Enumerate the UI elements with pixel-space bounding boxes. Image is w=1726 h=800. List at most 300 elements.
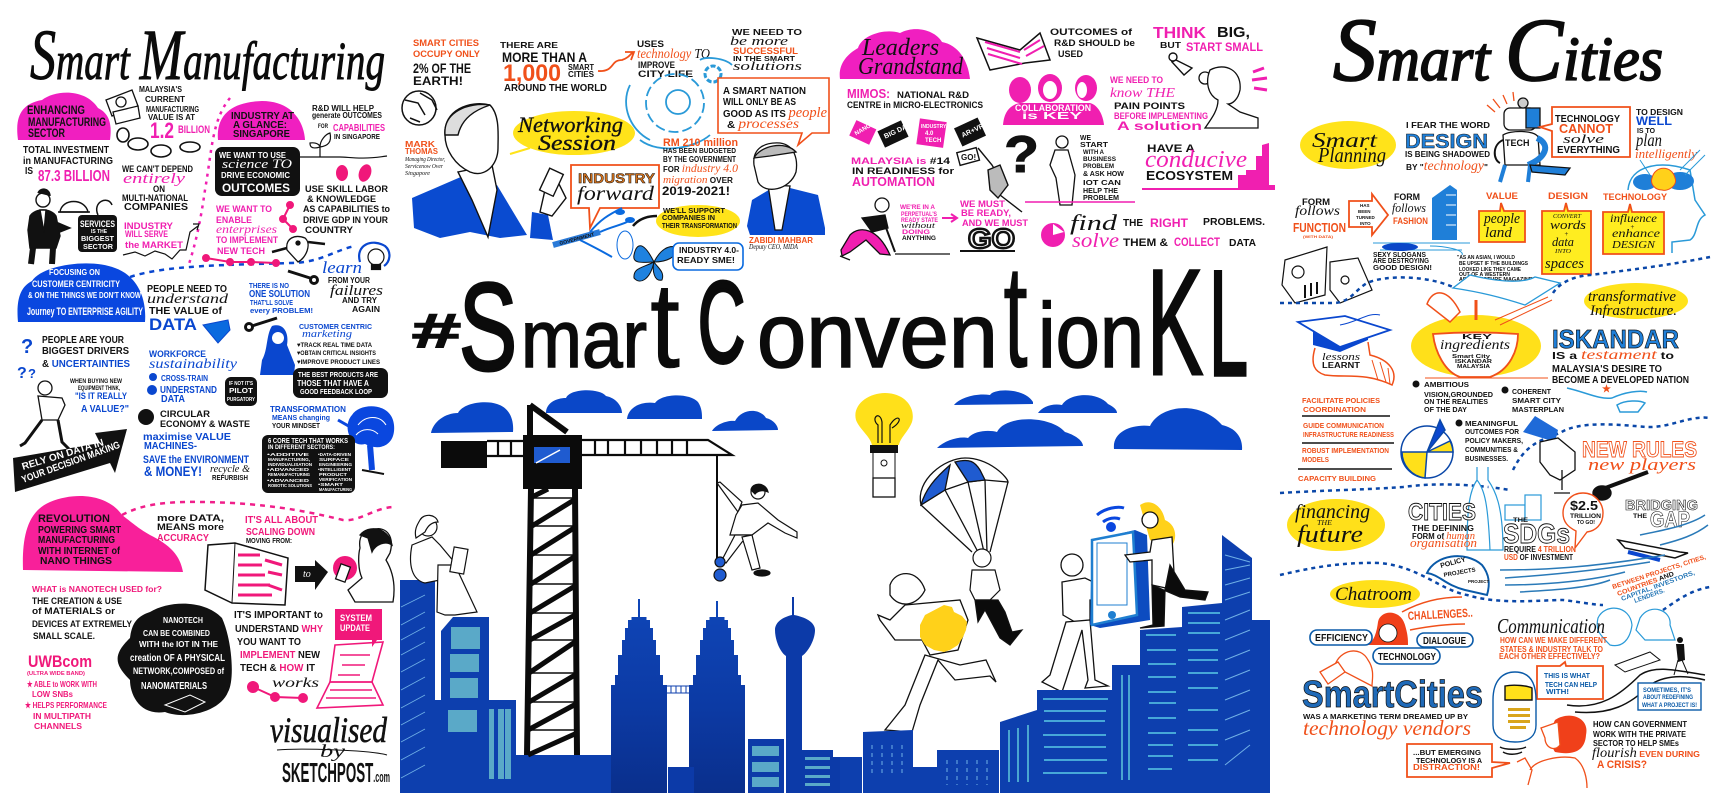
text: technology improves city life: IMPROVE [638,60,675,70]
callout: industry forward: INDUSTRY [578,170,656,186]
icon: robot [272,236,325,262]
text: uwbcom: CHANNELS [34,721,82,731]
text: more data accuracy: more DATA, [157,513,224,523]
text: meaningful outcomes: POLICY MAKERS, [1465,436,1523,445]
card: technology: DESIGN [1611,240,1657,251]
text: uwbcom: IN MULTIPATH [33,711,91,721]
card: technology: enhance [1612,226,1661,240]
illustration: person with phone [333,529,394,602]
callout: emerging tech distraction [1407,744,1510,777]
callout: nanotech black cloud: CAN BE COMBINED [143,629,210,638]
text: asian quote [1457,255,1536,283]
text: uwbcom: (ULTRA WIDE BAND) [27,671,85,677]
text: zabidi mahbar caption [748,236,813,251]
text: rm 210 million budget: HAS BEEN BUDGETED [663,148,736,155]
text: rm 210 million budget: migration OVER [663,174,733,186]
text: smart cities occupy 2%: SMART CITIES [413,38,479,48]
text: government and smes: flourish EVEN DURING [1592,746,1700,761]
text: iskandar testament [1552,324,1689,386]
panel: six core tech: ROBOTIC SOLUTIONS [268,483,312,488]
icon: question marks: ? [21,336,33,358]
text: to design well is to plan: intelligently [1635,146,1697,161]
text: value of data: PEOPLE NEED TO [147,284,227,295]
callout: rely on data arrow: RELY ON DATA IN [21,437,105,473]
text: maximise value machines: maximise VALUE [143,432,231,443]
callout: pilot purgatory: PILOT [229,388,254,395]
icon: wifi [1097,507,1124,530]
callout: support companies: THEIR TRANSFORMATION [662,223,737,230]
heading: #SmartConventionKL [414,234,1248,407]
callout: nanotech black cloud: NETWORK,COMPOSED of [133,666,225,676]
callout: drive economic outcomes [215,147,300,196]
text: between projects cities: BETWEEN PROJECTS, CITIES, [1611,554,1707,591]
arrow: to city life [598,52,634,71]
card: technology: TECHNOLOGY [1603,192,1668,203]
illustration: woman on winding road [1567,637,1705,713]
heading: #SmartConventionKL: # [414,305,460,357]
text: more successful solutions: SUCCESSFUL [733,46,798,57]
card: value: people [1483,211,1520,227]
text: find the right problems: PROBLEMS. [1203,217,1265,228]
illustration: government plant hand: GOVERNMENT [559,232,595,247]
text: find the right problems: COLLECT [1174,235,1221,249]
callout: what tech can help with: TECH CAN HELP [1545,680,1597,689]
text: is it really a value: A VALUE?" [81,404,129,415]
text: perpetual ready state: DOING [902,230,930,236]
panel: six core tech: •DATA-DRIVEN [318,452,351,457]
text: smart cities occupy 2% [413,38,480,88]
callout: $2.5 trillion to go [1563,493,1603,548]
text: fear the word design: BY "technology" [1406,159,1488,174]
text: meaningful outcomes: BUSINESSES. [1465,454,1508,463]
arrow: has been turned into: HAS [1360,203,1370,208]
callout: smart nation people and processes: A SMART NATION [723,86,806,97]
text: more successful solutions: solutions [733,58,802,73]
text: think big start small: START SMALL [1186,40,1263,54]
text: current manufacturing value [139,85,210,143]
panel: six core tech: INDIVIDUALISATION [268,462,312,467]
text: coherent masterplan: MASTERPLAN [1512,405,1564,414]
panel: six core tech: •ADDITIVE [267,452,309,457]
text: industry will serve the market: WILL SERVE [125,229,168,239]
text: more than 1,000 smart cities: AROUND THE WORLD [504,83,607,94]
callout: drive economic outcomes: science TO [222,156,293,171]
text: readiness for automation: IN READINESS for [852,166,954,177]
text: mark thomas caption: MARK [405,140,435,149]
text: business problem: WE [1080,133,1091,142]
callout: feedback loop: GOOD FEEDBACK LOOP [300,389,372,396]
callout: emerging tech distraction: ...BUT EMERGING [1413,748,1481,757]
text: sdgs: REQUIRE 4 TRILLION [1504,545,1576,554]
text: uwbcom: ★ ABLE to WORK WITH [27,679,97,689]
callout: technology cannot solve everything: CANNOT [1559,121,1613,136]
callout: technology cannot solve everything: EVERYTHING [1557,145,1620,156]
callout: smart nation people and processes [718,78,829,145]
text: form follows function: follows [1295,204,1341,219]
icon: pink network nodes [203,202,296,266]
text: uwbcom: LOW SNBs [32,689,73,699]
text: ambitious vision: ON THE REALITIES [1424,397,1488,406]
panel: six core tech: ENGINEERING [319,462,353,467]
text: no one solution: ONE SOLUTION [249,289,310,300]
text: more data accuracy: MEANS more [157,522,224,532]
text: outcomes of r&d: OUTCOMES of [1050,27,1133,37]
text: mark thomas caption: Singapore [405,171,430,177]
callout: drive economic outcomes: WE WANT TO USE [219,150,286,160]
panel: six core tech: MANUFACTURING [319,487,352,492]
text: more data accuracy [157,513,224,544]
text: visualised by sketchpost: visualised [270,710,388,750]
callout: system update [335,609,382,647]
illustration: key ingredients bowl: MALAYSIA [1457,364,1490,370]
text: form follows fashion: FORM [1394,192,1420,202]
callout: pilot purgatory [225,377,257,406]
text: we must go: BE READY, [961,208,1011,218]
text: form follows function: (WITH DATA) [1303,234,1334,239]
panel: six core tech: VERIFICATION [319,477,352,482]
illustration: left buildings [400,580,631,793]
text: r&d generates outcomes: IN SINGAPORE [334,134,380,141]
card: design: INTO [1554,249,1572,255]
text: communication [1497,614,1607,661]
illustration: starter pistol go flag [957,148,1022,212]
text: r&d generates outcomes: R&D WILL HELP [312,104,375,113]
illustration: skyscraper on water [1373,185,1470,255]
illustration: woman with challenges [1368,597,1473,645]
callout: services biggest sector: BIGGEST [81,236,115,243]
callout: drive economic outcomes: OUTCOMES [222,181,290,195]
text: skilled labor: COUNTRY [305,225,354,236]
text: why implement new tech: TECH & HOW IT [240,662,316,674]
arrow: to must be ready [942,214,957,222]
text: government and smes: A CRISIS? [1597,759,1647,771]
callout: drive economic outcomes: DRIVE ECONOMIC [221,170,290,180]
text: smart cities occupy 2%: OCCUPY ONLY [413,49,480,59]
text: customer centric marketing: marketing [302,328,353,340]
icon: globe [402,91,437,125]
text: form follows function: FORM [1302,197,1330,207]
text: zabidi mahbar caption: Deputy CEO, MIDA [748,243,799,251]
arrow: to smaller tech [295,560,328,590]
callout: customer centricity blue cloud: Journey TO ENTERPRISE AGILITY [27,306,143,318]
text: cities defining form: CITIES [1408,499,1476,526]
icon: question marks: ? [17,365,27,382]
illustration: graduation cap lessons learnt: lessons [1322,351,1360,363]
callout: industry at a glance singapore [218,101,305,140]
callout: nanotech black cloud: WITH the IOT IN THE [139,640,219,649]
callout: what tech can help with: WITH! [1546,687,1569,696]
text: we must go: WE MUST [960,199,1006,209]
illustration: zabidi mahbar portrait [747,143,825,235]
text: why implement new tech: IT'S IMPORTANT to [234,609,323,621]
icon: cyan gears [626,58,732,148]
card: value: land [1485,225,1513,241]
panel: smart manufacturing [13,15,395,788]
panel: six core tech: •ADVANCED [267,478,310,483]
callout: redefining a project: ABOUT REDEFINING [1643,695,1693,701]
text: we must go: GO [968,223,1015,254]
illustration: brain figure [338,406,394,474]
text: mimos: CENTRE in MICRO-ELECTRONICS [847,100,983,111]
text: business problem: PROBLEM [1083,195,1119,202]
callout: policy projects: PROJECT [1468,579,1490,584]
text: perpetual ready state [900,205,938,242]
panel: six core tech: IN DIFFERENT SECTORS: [268,445,335,451]
callout: customer centricity blue cloud: CUSTOMER CENTRICITY [32,279,120,289]
icon: book [977,33,1050,70]
text: what is nanotech: SMALL SCALE. [33,631,95,641]
arrow: to smaller tech: to [303,569,311,580]
text: mimos: MIMOS: [847,86,890,101]
text: fear the word design: DESIGN [1405,131,1488,153]
text: mimos: NATIONAL R&D [897,90,969,101]
panel: six core tech: MANUFACTURING, [268,457,310,462]
illustration: light blue city towers [1467,467,1541,550]
text: transformation mindset: YOUR MINDSET [272,421,320,430]
text: rm 210 million budget: 2019-2021! [662,184,730,198]
text: value of data [147,284,229,334]
illustration: orange hair man [1517,716,1587,788]
heading: smart cities: Smart Cities [1333,1,1663,100]
icon: question marks [17,336,36,382]
callout: redefining a project: SOMETIMES, IT'S [1643,688,1691,694]
callout: emerging tech distraction: DISTRACTION! [1413,763,1480,772]
callout: industry at a glance singapore: INDUSTRY AT [231,111,294,122]
text: zabidi mahbar caption: ZABIDI MAHBAR [749,236,813,245]
illustration: thinking man [1025,136,1135,205]
card: technology: + [1630,223,1635,231]
callout: what tech can help with: THIS IS WHAT [1544,671,1590,680]
illustration: collaboration is key: COLLABORATION [1015,103,1091,113]
illustration: man with glasses [1042,554,1122,692]
text: conducive ecosystem [1145,143,1247,183]
text: perpetual ready state: READY STATE [901,218,938,224]
text: rm 210 million budget: BY THE GOVERNMENT [663,155,736,164]
text: cities defining form: THE DEFINING [1412,524,1474,533]
text: is it really a value: WHEN BUYING NEW [70,379,122,385]
text: perpetual ready state: ANYTHING [902,236,936,242]
text: to design well is to plan: WELL [1636,114,1672,128]
callout: financing the future: THE [1317,519,1333,527]
text: current manufacturing value: MALAYSIA'S [139,85,183,94]
callout: smart planning [1300,121,1396,169]
text: no one solution: THAT'LL SOLVE [250,300,293,307]
text: scaling down: IT'S ALL ABOUT [245,515,318,526]
illustration: blue woman [260,325,295,375]
text: new rules new players: new players [1588,455,1696,474]
callout: $2.5 trillion to go: TRILLION [1570,514,1601,520]
illustration: key ingredients bowl: ingredients [1440,338,1511,353]
text: what is nanotech: of MATERIALS or [32,606,116,616]
text: outcomes of r&d: USED [1058,49,1083,59]
text: know the pain points: PAIN POINTS [1114,101,1185,111]
callout: nanotech black cloud [118,604,232,715]
callout: industry at a glance singapore: SINGAPORE [233,129,290,140]
text: meaningful outcomes: OUTCOMES FOR [1465,427,1520,436]
text: communication: HOW CAN WE MAKE DIFFERENT [1500,636,1607,645]
callout: emerging tech distraction: TECHNOLOGY IS A [1416,756,1483,765]
text: r&d generates outcomes [312,104,385,141]
text: new rules new players: NEW RULES [1582,437,1697,462]
arrow: has been turned into [1349,194,1388,235]
text: technology improves city life: CITY LIFE [638,69,693,79]
icon: blue light bulb [359,243,389,269]
text: perpetual ready state: without [901,221,936,230]
text: bridging the gap: BRIDGING [1625,497,1698,514]
text: enable enterprises: WE WANT TO [216,204,272,215]
text: skilled labor: & KNOWLEDGE [307,194,376,205]
icon: orange bulb [1320,651,1373,686]
text: asian quote: "AS AN ASIAN, I WOULD [1457,255,1515,261]
text: know the pain points: BEFORE IMPLEMENTING [1114,111,1208,121]
text: current manufacturing value: MANUFACTURING [146,105,199,114]
callout: feedback loop [293,368,388,398]
callout: chatroom [1330,580,1420,608]
text: between projects cities: LENDERS. [1633,587,1666,605]
text: visualised by sketchpost [270,710,390,788]
icon: pawn [1169,53,1192,75]
text: readiness for automation [851,156,954,189]
icon: sprout [300,133,387,158]
tag: technology [1373,648,1440,664]
text: cities defining form: organisation [1410,535,1477,550]
list: lessons learnt: CAPACITY BUILDING [1298,474,1376,483]
text: iskandar testament: MALAYSIA'S DESIRE TO [1552,364,1662,375]
text: is it really a value: "IS IT REALLY [75,391,127,401]
text: business problem: BUSINESS [1083,156,1117,163]
tag: efficiency [1310,630,1372,645]
callout: networking session [510,111,635,155]
callout: redefining a project [1638,683,1701,710]
text: find the right problems [1070,210,1265,252]
text: value of data: DATA [149,315,197,334]
chart: rising pink bars [1142,143,1275,190]
text: more successful solutions [730,27,802,73]
text: find the right problems: THEM & [1123,237,1168,249]
list: lessons learnt: GUIDE COMMUNICATION [1303,421,1384,430]
card: design: CONVERT [1553,214,1582,220]
text: find the right problems: THE [1123,218,1143,229]
text: technology improves city life: USES [637,39,664,49]
text: more than 1,000 smart cities: CITIES [568,70,595,79]
text: multi-national companies: WE CAN'T DEPEND [122,164,193,175]
illustration: key ingredients bowl: Smart City [1452,354,1490,360]
illustration: walking man [20,381,72,452]
text: why implement new tech: IMPLEMENT NEW [240,649,320,661]
illustration: brush and river [1500,515,1708,592]
text: business problem: IOT CAN [1083,178,1121,187]
text: sdgs [1503,518,1576,562]
text: visualised by sketchpost: SKETCHPOST.com [282,757,390,788]
icons: technology puzzle pieces: AR+VR [961,123,985,139]
text: mark thomas caption: Managing Director, [404,157,445,163]
callout: industry forward [571,165,659,228]
text: workforce sustainability: WORKFORCE [149,349,206,359]
tag: dialogue [1417,633,1473,647]
callout: pilot purgatory: PURGATORY [227,397,255,403]
text: what is nanotech: DEVICES AT EXTREMELY [32,619,132,629]
text: multi-national companies: ON [153,184,165,195]
list: lessons learnt [1298,396,1394,483]
callout: transformative infrastructure: Infrastructure. [1589,303,1677,319]
text: total investment: IS [25,166,33,177]
illustration: sprinter ready [840,198,950,260]
illustration: collaboration is key [1003,74,1104,125]
callout: policy projects: POLICY [1440,556,1467,570]
text: coherent masterplan: SMART CITY [1512,396,1561,405]
illustration: kl tower [748,597,853,793]
tag: technology: TECHNOLOGY [1378,652,1436,663]
text: customer centric marketing: ♥OBTAIN CRITICAL INSIGHTS [297,350,377,357]
text: more successful solutions: WE NEED TO [732,27,802,37]
text: cities defining form: FORM of human [1412,530,1475,542]
heading: #SmartConventionKL: t [1003,234,1028,399]
text: ambitious vision: OF THE DAY [1424,405,1467,414]
callout: leaders grandstand: Grandstand [858,54,964,80]
text: multi-national companies: COMPANIES [124,202,188,213]
callout: technology cannot solve everything: TECHNOLOGY [1555,114,1620,125]
text: learn from failures: AGAIN [352,305,380,314]
text: uwbcom: UWBcom [28,652,92,671]
chart: pie chart [1401,420,1453,478]
text: asian quote: BE UPSET IF THE BUILDINGS [1459,261,1529,267]
callout: revolution nano things pink cloud: REVOLUTION [38,513,110,525]
callout: transformative infrastructure: transformative [1588,289,1676,305]
text: think big start small: THINK [1153,25,1206,42]
text: business problem [1080,133,1125,202]
illustration: starter pistol go flag: GO! [961,153,976,162]
text: sexy slogans [1373,252,1432,272]
text: technology improves city life [637,39,710,79]
text: sdgs: SDGs [1503,518,1570,549]
icon: coins [117,128,200,157]
text: learn from failures: failures [330,283,383,299]
text: know the pain points: WE NEED TO [1110,75,1163,85]
text: what is nanotech: WHAT is NANOTECH USED for? [32,584,162,594]
text: uwbcom [25,652,107,731]
callout: policy projects [1427,556,1490,595]
callout: revolution nano things pink cloud [23,496,183,572]
text: maximise value machines: SAVE the ENVIRONMENT [143,454,249,466]
text: smart cities occupy 2%: 2% OF THE [413,60,471,76]
text: sexy slogans: SEXY SLOGANS [1373,252,1426,259]
text: drivers and uncertainties [42,335,130,370]
icon: money stack [106,90,140,124]
text: coherent masterplan: COHERENT [1512,387,1551,396]
text: transformation mindset: TRANSFORMATION [270,404,346,414]
callout: support companies [656,205,740,237]
text: communication: EACH OTHER EFFECTIVELY? [1499,652,1600,661]
list: lessons learnt: COORDINATION [1303,405,1366,414]
text: sexy slogans: ARE DESTROYING [1373,258,1429,265]
card: technology [1603,192,1668,254]
callout: $2.5 trillion to go: TO GO! [1577,520,1595,526]
text: perpetual ready state: WE'RE IN A [900,205,936,211]
text: industry will serve the market [124,221,184,250]
text: learn from failures [322,258,383,314]
text: more than 1,000 smart cities: MORE THAN A [502,49,587,65]
text: between projects cities: COUNTRIES AND [1616,571,1675,598]
text: business problem: & ASK HOW [1083,169,1125,178]
callout: smart nation people and processes: WILL ONLY BE AS [723,97,796,108]
text: maximise value machines: & MONEY! [144,463,202,479]
callout: technology cannot solve everything [1540,107,1630,157]
text: maximise value machines: MACHINES- [144,441,197,452]
text: bridging the gap [1625,497,1698,532]
card: design: data [1552,234,1574,249]
illustration: capsule robot [1493,672,1536,754]
callout: redefining a project: WHAT A PROJECT IS! [1642,703,1697,709]
